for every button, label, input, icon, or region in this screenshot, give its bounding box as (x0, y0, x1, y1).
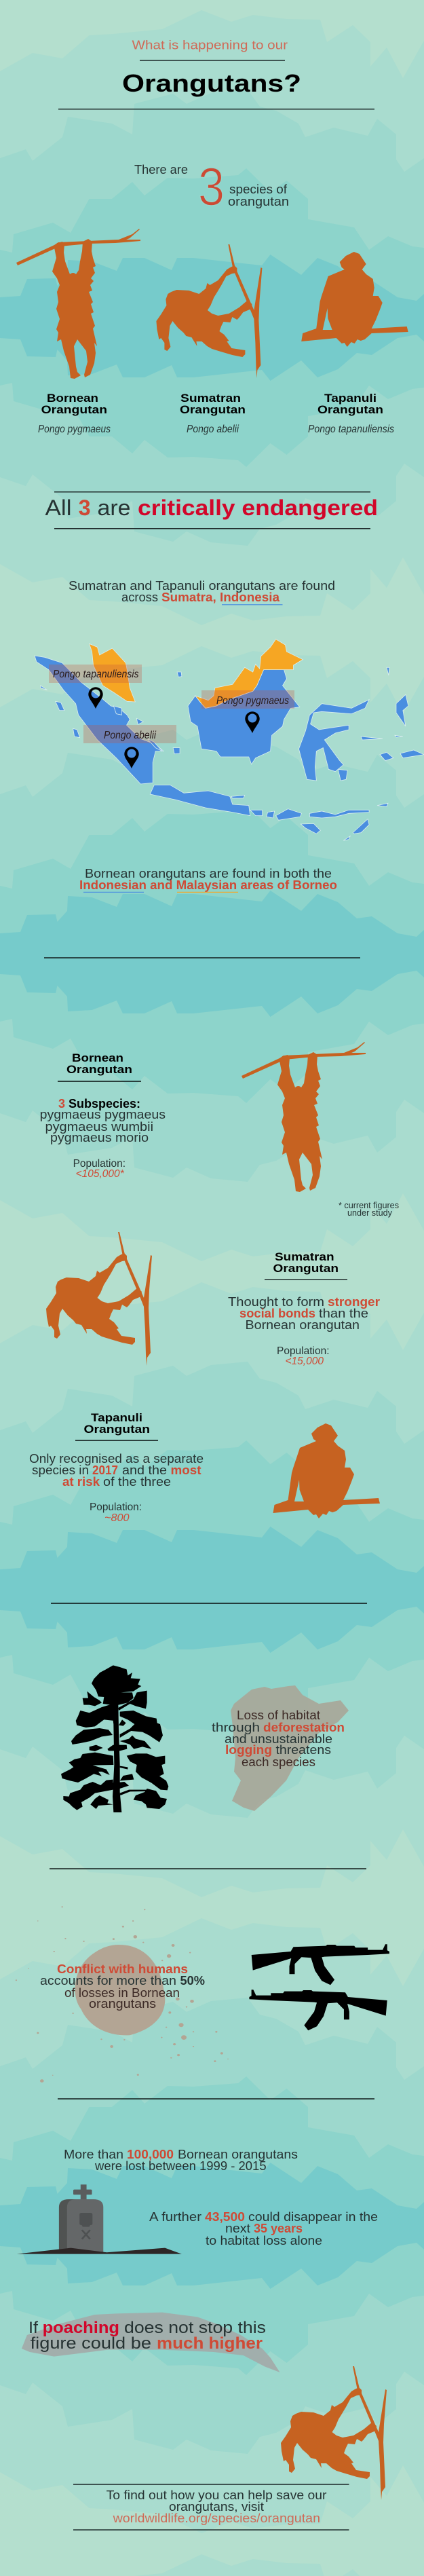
critically endangered banner: All (45, 496, 72, 520)
subspecies list: pygmaeus wumbii (45, 1120, 153, 1134)
label: tapanuli: Orangutan (317, 403, 383, 416)
critically endangered banner: are (98, 496, 130, 520)
label: tapanuli: Tapanuli (324, 392, 377, 405)
brush stroke behind text (22, 2313, 280, 2372)
habitat loss text (212, 1709, 345, 1769)
icon: sitting orangutan (273, 1423, 380, 1518)
heading (265, 1250, 347, 1280)
icon: sumatran orangutan swinging on pole (156, 244, 262, 378)
population: Population: (73, 1158, 126, 1170)
label: bornean: Pongo pygmaeus (38, 424, 111, 435)
description: Thought to form (228, 1295, 324, 1309)
statement: losses 1999-2015: More than (64, 2148, 123, 2161)
statement: further losses: 35 years (254, 2222, 303, 2235)
map intro text: Sumatra, Indonesia (161, 591, 280, 604)
description: of the three (103, 1475, 171, 1489)
heading: Orangutan (273, 1262, 339, 1275)
label: bornean: Bornean (47, 392, 98, 405)
subspecies list: pygmaeus morio (50, 1131, 149, 1144)
critically endangered banner (45, 491, 378, 529)
label: sumatran: Orangutan (180, 403, 246, 416)
description: Only recognised as a separate (29, 1452, 204, 1466)
icon: map pin tapanuli (88, 687, 103, 709)
icon: rifle mirrored (249, 1990, 387, 2030)
poaching text: If (28, 2319, 38, 2337)
description: stronger (328, 1295, 380, 1309)
call to action: To find out how you can help save our (107, 2488, 327, 2502)
splatter behind text (16, 1906, 229, 2083)
poaching text: does not stop this (124, 2319, 266, 2337)
heading: Bornean (72, 1051, 123, 1064)
subspecies list: 3 (58, 1097, 65, 1110)
species count statement: There are (134, 163, 188, 176)
icon: map pin abelii (124, 747, 139, 768)
heading (75, 1411, 158, 1441)
heading: Orangutan (84, 1423, 150, 1436)
footnote: * current figures (339, 1201, 399, 1210)
map intro text: across (121, 591, 158, 604)
icon: swinging orangutan (281, 2366, 387, 2500)
poaching text (28, 2319, 266, 2353)
conflict text (40, 1962, 205, 2011)
label: bornean: Orangutan (41, 403, 107, 416)
statement: further losses: A further (149, 2210, 201, 2224)
species row (16, 229, 408, 435)
subspecies list (40, 1097, 166, 1144)
Malaysian territory in orange (90, 639, 303, 708)
big number 3: 3 (198, 156, 225, 217)
label: Pongo pygmaeus: Pongo pygmaeus (216, 695, 289, 707)
label: Pongo pygmaeus (201, 690, 294, 709)
description: species in (32, 1463, 89, 1477)
habitat loss text: logging (225, 1743, 272, 1757)
borneo text (79, 867, 337, 893)
map intro text: Sumatran and Tapanuli orangutans are found (69, 579, 335, 593)
map intro text (69, 579, 335, 605)
habitat loss text: Loss of habitat (237, 1709, 320, 1722)
statement: losses 1999-2015: were lost between 1999 - 2015 (94, 2159, 267, 2173)
icon: tree silhouette (61, 1665, 168, 1812)
species count statement: orangutan (228, 195, 289, 208)
borneo text: Indonesian and Malaysian areas of Borneo (79, 878, 337, 892)
map of Indonesia and Malaysia (35, 639, 424, 840)
conflict text: of losses in Bornean (64, 1986, 180, 2000)
label: tapanuli (308, 392, 394, 435)
description: most (171, 1463, 201, 1477)
borneo text: Bornean orangutans are found in both the (85, 867, 332, 880)
statement: further losses (149, 2210, 378, 2247)
label: Pongo abelii: Pongo abelii (104, 730, 156, 741)
critically endangered banner: 3 (79, 496, 91, 520)
description: social bonds (239, 1307, 315, 1320)
poaching text: poaching (43, 2319, 119, 2337)
poaching text: figure could be (31, 2334, 151, 2353)
Indonesian islands in blue (35, 656, 424, 840)
poaching statement (22, 2313, 280, 2372)
habitat loss text: and unsustainable (225, 1732, 332, 1746)
icon: swinging orangutan (46, 1232, 152, 1366)
label: sumatran: Pongo abelii (187, 424, 239, 435)
label: Pongo tapanuliensis: Pongo tapanuliensis (53, 669, 138, 680)
icon: tapanuli orangutan sitting on branch (301, 252, 408, 347)
icon: gravestone (17, 2184, 182, 2254)
title block (58, 38, 374, 110)
subspecies list: Subspecies: (69, 1097, 140, 1110)
label: bornean (38, 392, 111, 435)
statement: further losses: to habitat loss alone (206, 2234, 322, 2247)
heading: Sumatran (275, 1250, 334, 1263)
statement: further losses: next (225, 2222, 250, 2235)
population: Population: (90, 1501, 142, 1513)
footnote: under study (347, 1208, 393, 1218)
icon: bornean orangutan hanging from branch (16, 229, 140, 379)
statement: further losses: could disappear in the (248, 2210, 378, 2224)
subspecies list: pygmaeus pygmaeus (40, 1108, 166, 1121)
statement: losses 1999-2015: 100,000 (127, 2148, 174, 2161)
subtitle: What is happening to our (132, 38, 288, 52)
conflict text: Conflict with humans (57, 1962, 188, 1976)
conflict text: 50% (180, 1974, 205, 1987)
statement: losses 1999-2015: Bornean orangutans (178, 2148, 298, 2161)
description: 2017 (92, 1463, 118, 1477)
icon: map pin pygmaeus (245, 711, 260, 733)
population (277, 1345, 330, 1367)
label: Pongo abelii (83, 725, 176, 743)
poaching text: much higher (157, 2334, 263, 2353)
description (29, 1452, 204, 1489)
panel: bornean orangutan (40, 1042, 399, 1218)
population (90, 1501, 142, 1524)
species count statement: species of (229, 183, 288, 196)
description: at risk (62, 1475, 100, 1489)
icon: rifle (252, 1944, 389, 1985)
icon: hanging orangutan (242, 1042, 366, 1192)
main title: Orangutans? (122, 69, 301, 97)
habitat loss text: each species (242, 1755, 315, 1769)
description: and the (122, 1463, 167, 1477)
habitat loss text: through (212, 1721, 260, 1734)
habitat loss text: deforestation (263, 1721, 345, 1734)
heading: Tapanuli (91, 1411, 142, 1424)
description (228, 1295, 380, 1332)
description: than the (319, 1307, 368, 1320)
statement: further losses: 43,500 (205, 2210, 245, 2224)
brush stroke behind text (231, 1685, 349, 1811)
statement: losses 1999-2015 (64, 2148, 298, 2173)
population: <105,000* (76, 1168, 124, 1180)
habitat loss text: threatens (275, 1743, 331, 1757)
conflict text: accounts for more than (40, 1974, 176, 1987)
call to action: orangutans, visit (169, 2500, 264, 2514)
population: ~800 (104, 1512, 130, 1524)
conflict text: orangutans (89, 1997, 156, 2011)
footnote (339, 1201, 399, 1218)
call to action: worldwildlife.org/species/orangutan (113, 2512, 320, 2525)
label: sumatran (180, 392, 246, 435)
critically endangered banner: critically endangered (138, 496, 378, 520)
heading: Orangutan (66, 1063, 132, 1076)
label: Pongo tapanuliensis (49, 665, 142, 683)
species count statement (134, 156, 289, 217)
label: sumatran: Sumatran (180, 392, 241, 405)
heading (58, 1051, 141, 1082)
population (73, 1158, 126, 1180)
population: <15,000 (285, 1356, 324, 1367)
map species labels (49, 665, 294, 768)
population: Population: (277, 1345, 330, 1357)
panel: sumatran orangutan (46, 1232, 380, 1367)
description: Bornean orangutan (246, 1318, 360, 1332)
panel: conflict with humans (16, 1906, 389, 2083)
panel: tapanuli orangutan (29, 1411, 380, 1524)
panel: habitat loss (61, 1665, 349, 1812)
label: tapanuli: Pongo tapanuliensis (308, 424, 394, 435)
call to action (73, 2484, 349, 2531)
